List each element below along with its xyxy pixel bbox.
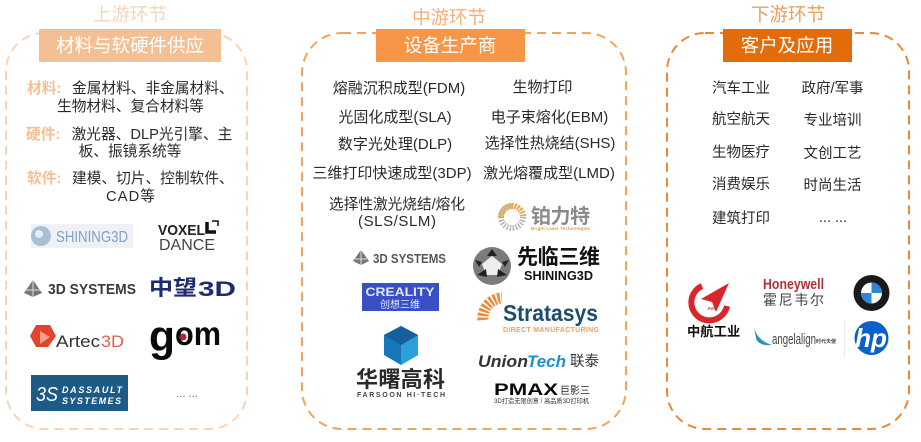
logo: PMAX: PMAX	[494, 380, 559, 399]
logo: UnionTech: Tech	[527, 352, 566, 371]
process list: right column	[483, 79, 615, 182]
process list: right column: 激光熔覆成型(LMD)	[483, 165, 615, 182]
application list: right column	[801, 80, 864, 226]
logo: Shining 3D Chinese: 先临三维	[517, 246, 600, 269]
process list: left column: (SLS/SLM)	[358, 213, 436, 230]
application list: left column: 航空航天	[712, 111, 770, 128]
logo: Shining 3D	[31, 224, 133, 248]
panel: upstream	[6, 4, 247, 429]
application list: right column: ... ...	[819, 210, 847, 226]
logo: Honeywell	[763, 277, 824, 308]
application list: right column: 政府/军事	[801, 80, 864, 97]
logo: Dassault Systemes: SYSTEMES	[62, 396, 121, 406]
logo: ZW3D: 3D	[198, 278, 236, 301]
logo: Creality: 创想三维	[380, 298, 420, 311]
process list: left column: 数字光处理(DLP)	[338, 136, 452, 153]
logo: PMAX: 3D打造无限创意 / 高品质3D打印机	[494, 396, 589, 405]
logo: AVIC: AVC	[707, 306, 717, 311]
text block: software	[27, 170, 234, 205]
application list: right column: 专业培训	[804, 112, 862, 129]
logo: UnionTech: 联泰	[570, 353, 599, 370]
header bar: downstream: 客户及应用	[741, 35, 833, 56]
text block: hardware	[26, 126, 232, 160]
process list: right column: 生物打印	[512, 79, 573, 96]
logo: GOM	[149, 312, 221, 361]
text block: hardware: 激光器、DLP光引擎、主	[72, 126, 232, 143]
logo: Dassault Systemes: DASSAULT	[62, 385, 124, 395]
logo: Artec 3D	[30, 325, 124, 351]
logo: Bright Laser Technologies: 铂力特	[531, 205, 590, 228]
panel: midstream	[302, 7, 626, 429]
header bar: midstream	[376, 29, 525, 62]
logo: Artec 3D: Artec	[56, 332, 101, 351]
process list: left column: 光固化成型(SLA)	[338, 109, 452, 126]
text block: hardware: 硬件:	[26, 126, 60, 143]
logo: Angelalign: 时代天使	[816, 338, 836, 345]
logo: Creality	[362, 283, 439, 311]
divider	[844, 320, 845, 357]
text block: materials: 金属材料、非金属材料、	[72, 80, 234, 97]
logo: Voxel Dance: VOXEL	[158, 222, 205, 239]
application list: right column: 文创工艺	[804, 145, 862, 162]
logo: Dassault Systemes	[31, 375, 128, 411]
logo: HP: hp	[855, 323, 887, 353]
text block: software: CAD等	[106, 187, 155, 205]
ellipsis: ... ...	[176, 388, 198, 400]
panel outline: upstream	[6, 33, 247, 429]
logo: Dassault Systemes: 3S	[36, 384, 59, 406]
text block: materials: 生物材料、复合材料等	[57, 97, 204, 115]
logo: BMW	[854, 275, 890, 311]
logo: Stratasys: Stratasys	[503, 300, 598, 326]
logo: Farsoon: 华曙高科	[356, 367, 445, 392]
logo: UnionTech	[478, 352, 599, 371]
process list: right column: 电子束熔化(EBM)	[491, 109, 608, 126]
text block: software: 建模、切片、控制软件、	[72, 170, 234, 187]
text block: hardware: 板、振镜系统等	[79, 142, 182, 160]
logo: Honeywell: 霍尼韦尔	[763, 292, 824, 308]
logo: Shining 3D Chinese: SHINING3D	[524, 268, 593, 283]
application list: left column: 消费娱乐	[712, 176, 770, 193]
header bar: upstream: 材料与软硬件供应	[56, 35, 204, 56]
logo: Angelalign: angelalign	[772, 331, 816, 348]
header bar: upstream	[39, 29, 221, 62]
logo: Farsoon	[356, 326, 445, 399]
process list: right column: 选择性热烧结(SHS)	[485, 135, 615, 152]
panel: downstream	[667, 4, 909, 429]
process list: left column: 熔融沉积成型(FDM)	[333, 80, 465, 97]
text block: software: 软件:	[27, 170, 61, 187]
logo: PMAX: 巨影三	[560, 385, 590, 397]
process list: left column: 选择性激光烧结/熔化	[329, 196, 465, 213]
logo: 3D Systems: 3D SYSTEMS	[48, 281, 136, 298]
application list: left column: 生物医疗	[712, 144, 770, 161]
logo: 3D Systems: 3D SYSTEMS	[373, 251, 446, 266]
logo: PMAX	[494, 380, 590, 405]
heading: midstream: 中游环节	[412, 7, 486, 28]
application list: left column	[712, 80, 770, 227]
heading: upstream: 上游环节	[93, 4, 167, 25]
text block: materials: 材料:	[27, 79, 61, 97]
process list: left column: 三维打印快速成型(3DP)	[312, 165, 472, 182]
application list: left column: 汽车工业	[712, 80, 770, 97]
logo: Voxel Dance	[158, 221, 218, 254]
logo: Bright Laser Technologies	[501, 205, 590, 231]
logo: UnionTech: Union	[478, 352, 528, 371]
logo: Shining 3D Chinese	[473, 246, 600, 285]
panel outline: midstream	[302, 33, 626, 429]
logo: Shining 3D: SHINING3D	[56, 229, 128, 246]
logo: GOM: om	[175, 315, 221, 352]
logo: Stratasys	[483, 298, 600, 334]
logo: ZW3D: 中望	[149, 277, 197, 300]
logo: ZW3D	[149, 277, 236, 301]
logo: Angelalign	[754, 327, 836, 348]
logo: GOM: g	[149, 312, 175, 361]
panel outline: downstream	[667, 33, 909, 429]
logo: Farsoon: FARSOON HI·TECH	[357, 392, 445, 399]
logo: Stratasys: DIRECT MANUFACTURING	[503, 327, 600, 334]
logo: 3D Systems	[353, 250, 446, 266]
logo: Creality: CREALITY	[366, 285, 434, 299]
process list: left column	[312, 80, 472, 230]
logo: AVIC: 中航工业	[687, 323, 740, 339]
header bar: downstream	[723, 29, 852, 62]
logo: Voxel Dance: DANCE	[159, 237, 215, 254]
application list: left column: 建筑打印	[712, 210, 770, 227]
logo: Bright Laser Technologies: Bright Laser Technologies	[531, 226, 590, 231]
application list: right column: 时尚生活	[804, 177, 862, 194]
logo: Honeywell: Honeywell	[763, 277, 824, 293]
text block: materials	[27, 79, 234, 115]
header bar: midstream: 设备生产商	[404, 35, 496, 56]
heading: downstream: 下游环节	[751, 4, 825, 25]
logo: Artec 3D: 3D	[101, 332, 124, 351]
logo: AVIC	[687, 283, 740, 339]
